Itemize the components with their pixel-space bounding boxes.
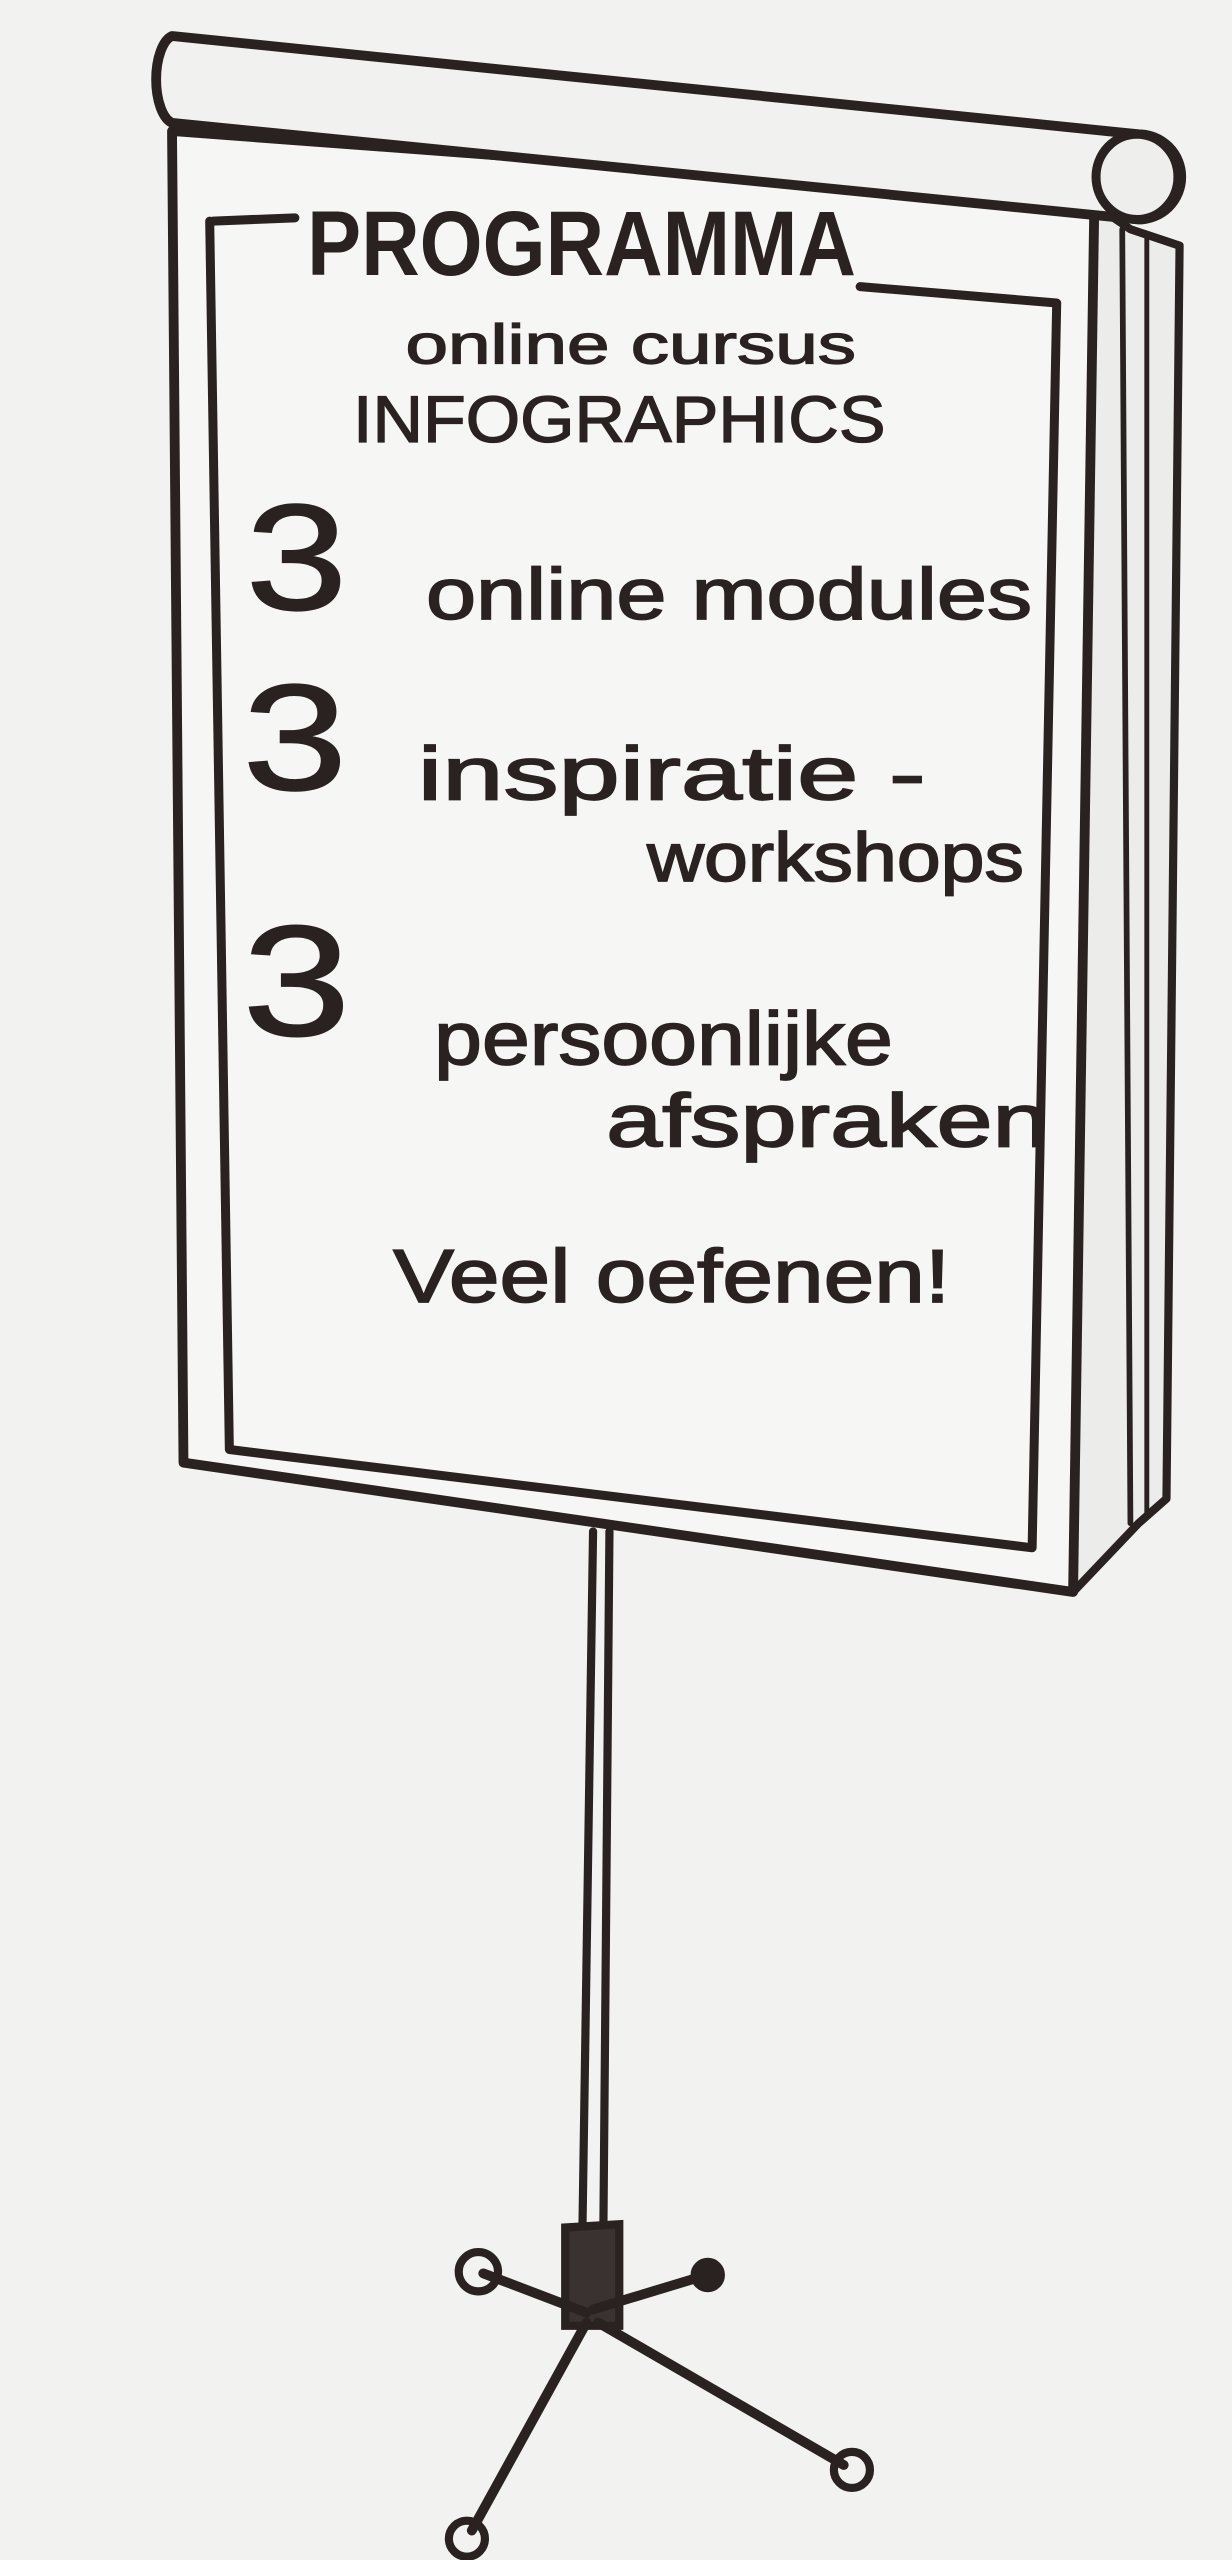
title: online cursus [405, 314, 856, 376]
item 2 [242, 653, 1024, 896]
stand pole and base [449, 1531, 870, 2557]
item 3: afspraken [606, 1079, 1049, 1163]
item 1 [246, 473, 1032, 641]
top roll [156, 36, 1181, 219]
closing note: Veel oefenen! [393, 1234, 950, 1318]
item 2: 3 [242, 653, 347, 821]
side pages [1073, 205, 1180, 1592]
item 3: persoonlijke [434, 997, 893, 1081]
item 1: online modules [426, 555, 1032, 635]
title [307, 193, 886, 456]
item 3 [242, 894, 1049, 1163]
title: PROGRAMMA [307, 193, 856, 295]
title: INFOGRAPHICS [353, 383, 885, 456]
inner frame [210, 218, 1057, 1548]
board outer [172, 131, 1094, 1592]
item 3: 3 [242, 894, 351, 1069]
item 2: workshops [646, 819, 1024, 896]
item 2: inspiratie - [418, 731, 926, 815]
item 1: 3 [246, 473, 347, 641]
flip chart board [156, 36, 1181, 1592]
